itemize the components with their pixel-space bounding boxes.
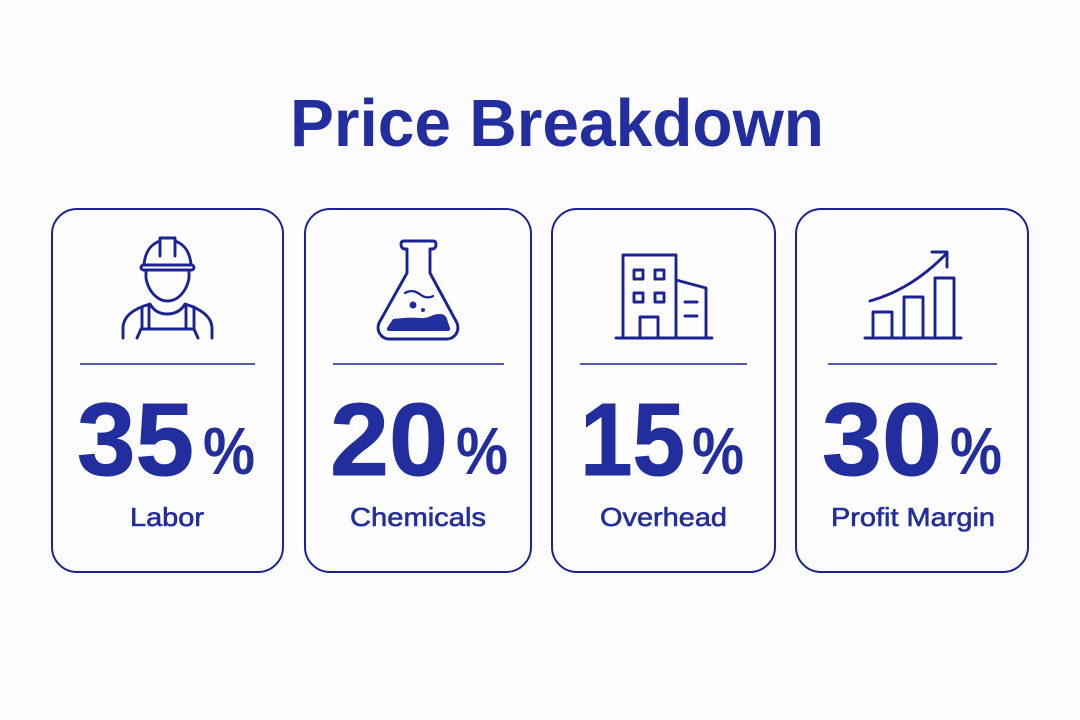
label: Labor: Labor — [130, 502, 204, 532]
value: 20%: 20 — [330, 382, 448, 497]
label: Overhead: Overhead — [600, 502, 727, 532]
icon: growth chart — [865, 252, 961, 338]
label: Chemicals: Chemicals — [350, 502, 486, 532]
value: 35% — [77, 382, 255, 497]
value: 15% — [580, 382, 744, 497]
value: 20% — [330, 382, 508, 497]
panel: labor — [52, 209, 283, 572]
value: 15%: 15 — [580, 382, 685, 497]
icon: building — [616, 255, 712, 338]
value: 30%: 30 — [822, 382, 942, 497]
title: Price Breakdown — [290, 86, 824, 161]
value: 35%: 35 — [77, 382, 194, 497]
value: 30%: % — [950, 414, 1002, 489]
label: Profit Margin: Profit Margin — [831, 502, 995, 532]
value: 20%: % — [456, 414, 508, 489]
value: 35%: % — [203, 414, 255, 489]
panel: overhead — [552, 209, 775, 572]
panel: chemicals — [305, 209, 531, 572]
panel: profit margin — [796, 209, 1028, 572]
icon: worker — [123, 238, 212, 338]
value: 15%: % — [692, 414, 744, 489]
value: 30% — [822, 382, 1002, 497]
icon: flask — [378, 241, 458, 339]
